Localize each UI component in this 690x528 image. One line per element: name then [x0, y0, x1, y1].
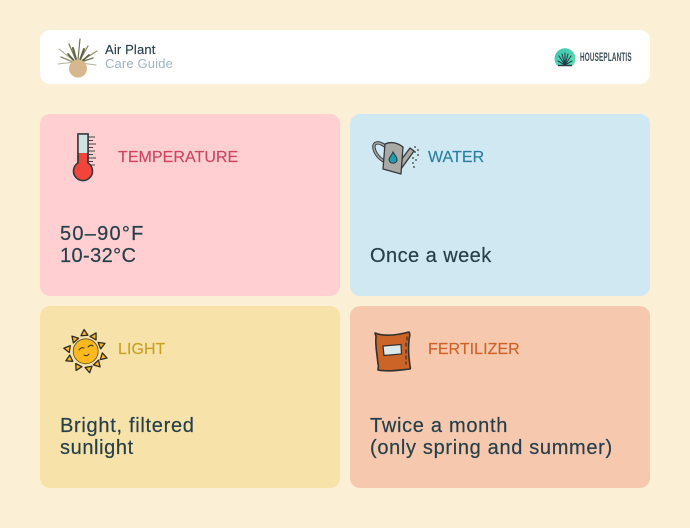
title: Air Plant Care Guide: Care Guide	[105, 56, 173, 71]
text: temperature range	[60, 223, 145, 267]
heading: fertilizer: FERTILIZER	[428, 341, 520, 358]
text: fertilizer frequency: (only spring and summer)	[370, 437, 613, 459]
text: temperature range: 50–90°F	[60, 223, 145, 245]
text: fertilizer frequency	[370, 415, 613, 459]
text: water frequency: Once a week	[370, 245, 492, 267]
panel: water	[350, 114, 650, 296]
logo: Houseplantis	[554, 48, 632, 66]
title: Air Plant Care Guide: Air Plant	[105, 42, 155, 57]
text: fertilizer frequency: Twice a month	[370, 415, 508, 437]
panel: light	[40, 306, 340, 488]
text: light requirements: sunlight	[60, 437, 134, 459]
icon: watering can	[372, 141, 419, 175]
header bar	[40, 30, 650, 84]
heading: temperature: TEMPERATURE	[118, 149, 238, 166]
heading: light: LIGHT	[118, 341, 165, 358]
icon: thermometer	[72, 133, 96, 182]
icon: sun	[63, 328, 108, 374]
text: light requirements	[60, 415, 195, 459]
text: temperature range: 10-32°C	[60, 245, 136, 267]
icon: air plant in pot	[58, 38, 98, 78]
panel: temperature	[40, 114, 340, 296]
panel: fertilizer	[350, 306, 650, 488]
text: light requirements: Bright, filtered	[60, 415, 195, 437]
logo: Houseplantis: HOUSEPLANTIS	[580, 50, 632, 64]
title: Air Plant Care Guide	[105, 42, 173, 71]
icon: fertilizer bag	[374, 331, 412, 372]
heading: water: WATER	[428, 149, 484, 166]
